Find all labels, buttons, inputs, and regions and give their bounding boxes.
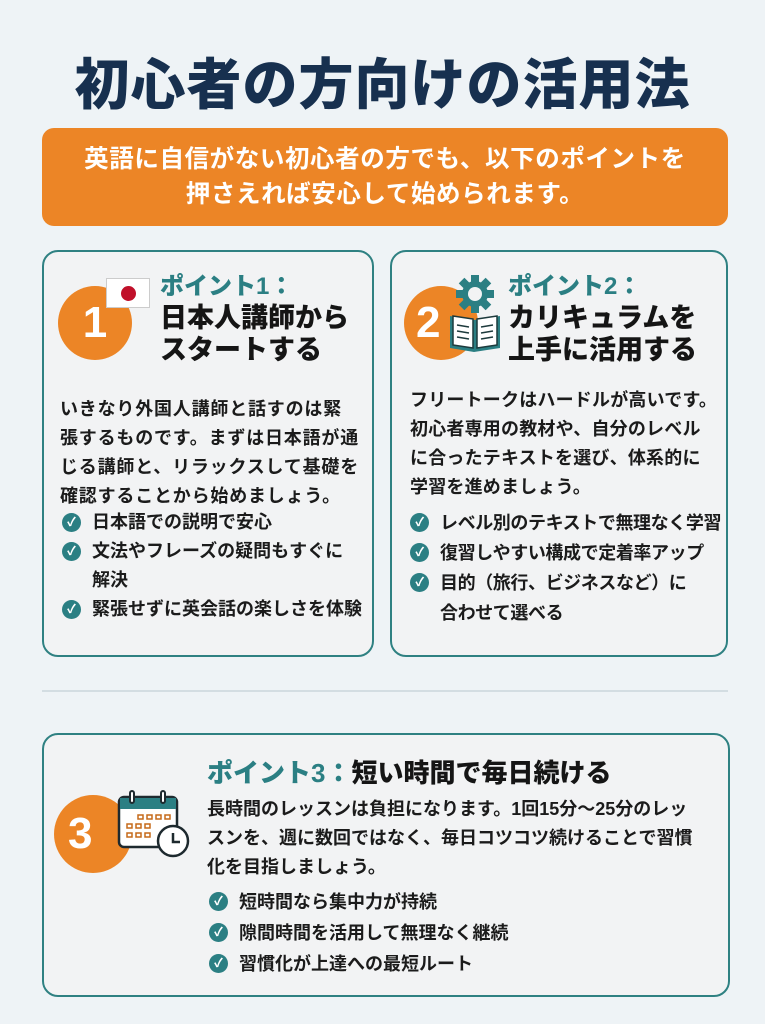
panel: point 1 xyxy=(42,250,374,657)
checklist 3: 隙間時間を活用して無理なく継続 xyxy=(239,923,508,943)
checklist 1 xyxy=(62,512,362,619)
checklist 3: 習慣化が上達への最短ルート xyxy=(239,954,473,974)
heading 2: カリキュラムを xyxy=(508,303,696,333)
heading 2 xyxy=(508,273,697,365)
icon: calendar with clock xyxy=(118,790,190,858)
checklist 3: 短時間なら集中力が持続 xyxy=(239,892,437,912)
body 2: 学習を進めましょう。 xyxy=(410,477,591,497)
banner xyxy=(42,128,728,226)
body 1 xyxy=(60,399,359,506)
icon: japan flag xyxy=(106,278,150,308)
number circle 3: 3 xyxy=(68,809,92,858)
heading 1: 日本人講師から xyxy=(160,303,349,333)
heading 1: スタートする xyxy=(160,335,322,365)
heading 1: ポイント1： xyxy=(160,273,293,300)
heading 2: ポイント2： xyxy=(508,273,641,300)
icon: gear and book xyxy=(450,275,500,352)
body 1: 張するものです。まずは日本語が通 xyxy=(60,428,359,448)
number circle 1 xyxy=(58,286,132,360)
body 3 xyxy=(207,799,692,877)
panel: point 3 xyxy=(42,733,730,997)
title: 初心者の方向けの活用法 xyxy=(74,54,690,116)
heading 3: ポイント3：短い時間で毎日続ける xyxy=(207,758,611,788)
checklist 1: 文法やフレーズの疑問もすぐに xyxy=(92,541,343,561)
body 2: に合ったテキストを選び、体系的に xyxy=(410,448,701,468)
banner: 押さえれば安心して始められます。 xyxy=(186,181,584,208)
body 2: フリートークはハードルが高いです。 xyxy=(410,390,717,410)
body 1: いきなり外国人講師と話すのは緊 xyxy=(60,399,342,419)
checklist 2 xyxy=(410,513,721,623)
checklist 2: 目的（旅行、ビジネスなど）に xyxy=(440,573,686,593)
body 3: 化を目指しましょう。 xyxy=(207,857,386,877)
number circle 2 xyxy=(404,286,478,360)
checklist 2: 合わせて選べる xyxy=(440,603,563,623)
number circle 3 xyxy=(54,795,132,873)
checklist 1: 緊張せずに英会話の楽しさを体験 xyxy=(92,599,362,619)
checklist 1: 解決 xyxy=(92,570,128,590)
body 1: 確認することから始めましょう。 xyxy=(60,486,341,506)
number circle 1: 1 xyxy=(83,298,107,347)
checklist 2: 復習しやすい構成で定着率アップ xyxy=(440,543,704,563)
number circle 2: 2 xyxy=(416,298,440,347)
body 2: 初心者専用の教材や、自分のレベル xyxy=(410,419,701,439)
checklist 2: レベル別のテキストで無理なく学習 xyxy=(440,513,721,533)
heading 2: 上手に活用する xyxy=(508,335,697,365)
heading 1 xyxy=(160,273,349,365)
panel: point 2 xyxy=(390,250,728,657)
checklist 1: 日本語での説明で安心 xyxy=(92,512,272,532)
banner: 英語に自信がない初心者の方でも、以下のポイントを xyxy=(84,146,686,173)
body 3: スンを、週に数回ではなく、毎日コツコツ続けることで習慣 xyxy=(207,828,692,848)
body 3: 長時間のレッスンは負担になります。1回15分〜25分のレッ xyxy=(207,799,687,819)
body 1: じる講師と、リラックスして基礎を xyxy=(60,457,359,477)
body 2 xyxy=(410,390,717,497)
checklist 3 xyxy=(209,892,508,974)
